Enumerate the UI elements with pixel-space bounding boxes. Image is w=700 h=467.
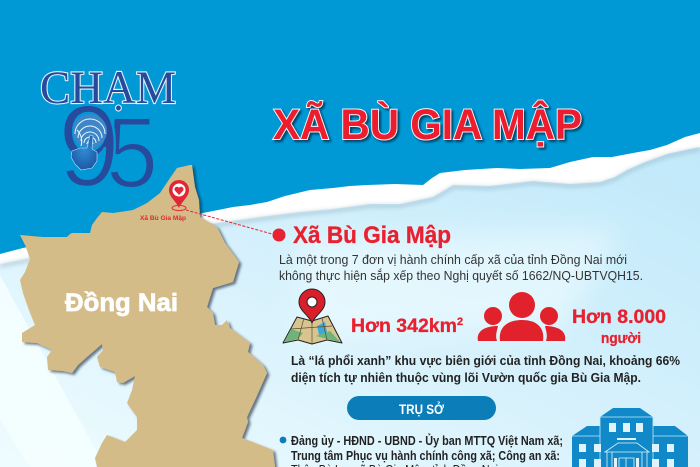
stat: population xyxy=(572,307,666,347)
icon: fingerprint xyxy=(73,114,107,148)
dashed connector xyxy=(186,210,272,234)
stat: area: Hơn 342km xyxy=(351,315,457,337)
icon: building xyxy=(572,408,688,467)
map pin: Bù Gia Mập xyxy=(169,180,189,211)
logo number: 9: 9 xyxy=(58,81,120,211)
headquarters bullet text: Trung tâm Phục vụ hành chính công xã; Công an xã: xyxy=(291,449,560,463)
icon: map with pin xyxy=(283,289,342,344)
section heading: Xã Bù Gia Mập xyxy=(293,222,451,249)
highlight text: diện tích tự nhiên thuộc vùng lõi Vườn quốc gia Bù Gia Mập. xyxy=(291,370,641,385)
pin label: Xã Bù Gia Mập xyxy=(140,215,186,222)
logo word: CHẠM: CHẠM xyxy=(40,62,176,114)
map label: Đồng Nai: Đồng Nai xyxy=(65,289,178,317)
stat: area: 2 xyxy=(457,316,463,328)
map: Đồng Nai province xyxy=(20,165,275,467)
intro text: không thực hiện sắp xếp theo Nghị quyết số 1662/NQ-UBTVQH15. xyxy=(279,268,643,283)
icon: people xyxy=(478,292,565,341)
logo number: 5: 5 xyxy=(106,97,158,209)
logo: Chạm 95 xyxy=(40,62,176,211)
headquarters bullet text: Đảng ủy - HĐND - UBND - Ủy ban MTTQ Việt Nam xã; xyxy=(291,433,563,448)
stat: population: Hơn 8.000 xyxy=(572,307,666,328)
highlight text: Là “lá phổi xanh” khu vực biên giới của tỉnh Đồng Nai, khoảng 66% xyxy=(291,353,680,368)
headquarters bullet text xyxy=(280,433,566,467)
stat: population: người xyxy=(601,330,641,347)
headquarters pill xyxy=(347,396,496,420)
background: torn paper and light panel xyxy=(0,133,700,467)
intro text: Là một trong 7 đơn vị hành chính cấp xã của tỉnh Đồng Nai mới xyxy=(279,252,627,267)
title: XÃ BÙ GIA MẬP xyxy=(273,100,582,149)
headquarters pill: TRỤ SỞ xyxy=(399,402,444,417)
icon: touching hand xyxy=(71,135,97,170)
